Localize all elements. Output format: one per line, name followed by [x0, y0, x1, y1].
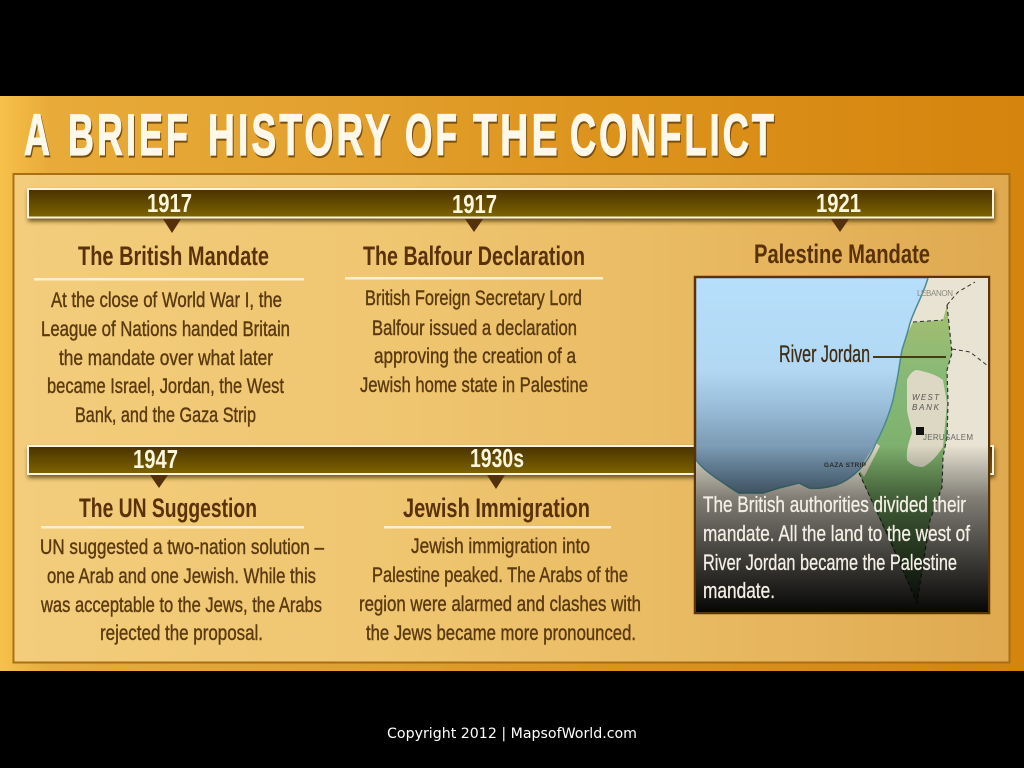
- text block: Jewish home state in Palestine: [360, 374, 588, 397]
- year marker: 1930s: 1930s: [470, 443, 524, 473]
- text block: Balfour issued a declaration: [372, 317, 577, 340]
- map: coastline: [696, 278, 928, 493]
- text block: the Jews became more pronounced.: [366, 622, 636, 645]
- map: labels: LEBANON: [917, 289, 953, 298]
- text block: British Foreign Secretary Lord: [365, 287, 582, 310]
- text block: map caption: [703, 492, 971, 603]
- year marker: 1917 Balfour: 1917: [452, 189, 497, 219]
- panel: map: [695, 277, 989, 613]
- year marker: 1917 British Mandate: 1917: [147, 188, 192, 218]
- text block: At the close of World War I, the: [51, 289, 282, 312]
- text block: the mandate over what later: [59, 347, 273, 370]
- text block: became Israel, Jordan, the West: [47, 375, 284, 398]
- heading: The British Mandate: [78, 241, 269, 271]
- heading: The Balfour Declaration: [363, 241, 585, 271]
- panel: Jewish Immigration: [359, 493, 641, 645]
- panel: map: WEST: [912, 393, 940, 402]
- text block: Palestine peaked. The Arabs of the: [372, 564, 628, 587]
- text block: [41, 289, 290, 427]
- year marker: 1917 Balfour: [452, 189, 497, 232]
- panel: map: JERUSALEM: [923, 433, 973, 442]
- title: THE: [473, 103, 561, 168]
- text block: one Arab and one Jewish. While this: [47, 565, 316, 588]
- title: A: [24, 103, 53, 168]
- map: green territory: [859, 305, 952, 603]
- text block: Jewish immigration into: [411, 535, 590, 558]
- title: CONFLICT: [570, 103, 777, 168]
- text block: [360, 287, 588, 397]
- text block: UN suggested a two-nation solution –: [40, 536, 324, 559]
- text block: League of Nations handed Britain: [41, 318, 290, 341]
- callout: River Jordan: River Jordan: [779, 341, 870, 368]
- year marker: 1930s: [470, 443, 524, 489]
- map: West Bank: [907, 370, 947, 467]
- title: BRIEF: [68, 103, 191, 168]
- icon: Jerusalem marker: [916, 427, 924, 435]
- year marker: 1947: [133, 444, 178, 488]
- text block: rejected the proposal.: [100, 622, 263, 645]
- year marker: 1947: 1947: [133, 444, 178, 474]
- panel: The British Mandate: [34, 241, 304, 427]
- text block: approving the creation of a: [374, 345, 576, 368]
- panel: The Balfour Declaration: [345, 241, 603, 397]
- panel: The UN Suggestion: [40, 493, 324, 645]
- map: Gaza strip: [859, 443, 880, 477]
- heading: Jewish Immigration: [403, 493, 590, 523]
- copyright: Copyright 2012 | MapsofWorld.com: [387, 726, 637, 742]
- text block: [40, 536, 324, 645]
- title: [24, 103, 777, 168]
- map: dark fade: [696, 450, 988, 612]
- title: OF: [405, 103, 460, 168]
- text block: map caption: mandate.: [703, 578, 775, 603]
- title: HISTORY: [208, 103, 393, 168]
- text block: was acceptable to the Jews, the Arabs: [40, 594, 322, 617]
- map: river and border: [917, 305, 952, 603]
- text block: region were alarmed and clashes with: [359, 593, 641, 616]
- year marker: 1921: 1921: [816, 188, 861, 218]
- timeline bar: top: [28, 188, 993, 233]
- content panel: [14, 174, 1010, 662]
- heading: The UN Suggestion: [79, 493, 257, 523]
- timeline bar: bottom: [28, 443, 993, 489]
- text block: [359, 535, 641, 645]
- panel: map: BANK: [912, 403, 940, 412]
- background band: [0, 96, 1024, 671]
- text block: Bank, and the Gaza Strip: [75, 404, 256, 427]
- panel: map: GAZA STRIP: [824, 462, 867, 469]
- heading: Palestine Mandate: Palestine Mandate: [754, 239, 930, 269]
- year marker: 1921: [816, 188, 861, 232]
- year marker: 1917 British Mandate: [147, 188, 192, 233]
- map: land: [696, 278, 988, 612]
